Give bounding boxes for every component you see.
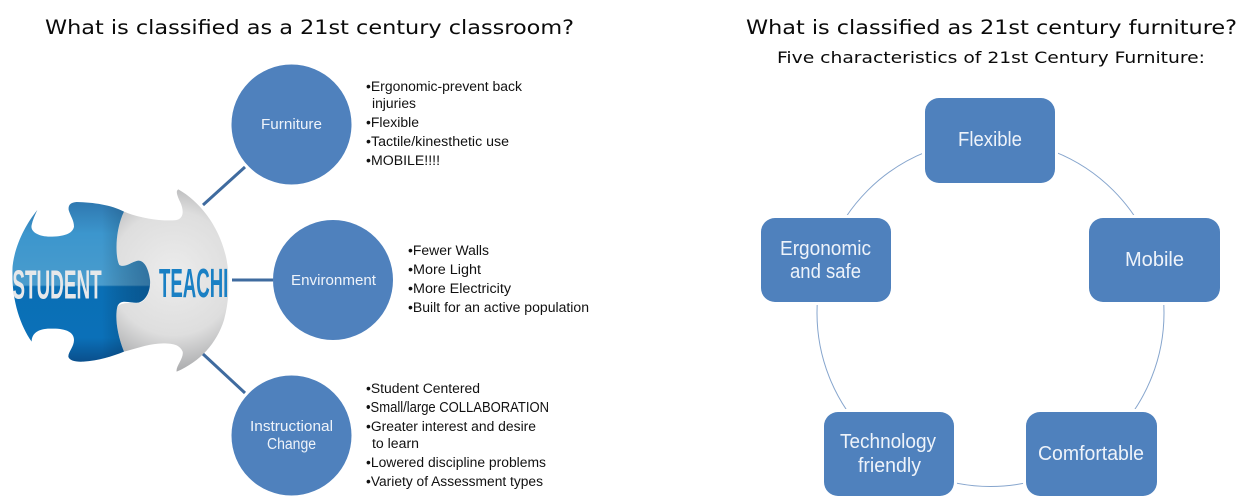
text block: furniture list: •Flexible (366, 115, 419, 130)
text block: furniture list: injuries (372, 96, 416, 111)
text block: environment list (408, 243, 589, 315)
text block: furniture list (366, 79, 522, 168)
title: furniture: What is classified as 21st century furniture? (746, 16, 1237, 39)
panel: classroom diagram: TEACHI (159, 260, 228, 306)
text block: environment list: •More Light (408, 262, 481, 277)
node: instructional change: Change (267, 436, 316, 453)
box: technology friendly: friendly (858, 455, 921, 477)
connector: instructional change (203, 354, 245, 393)
puzzle piece: teacher (116, 189, 229, 372)
node: instructional change (232, 376, 352, 496)
node: furniture (232, 64, 352, 184)
connector: environment (232, 278, 273, 282)
box: flexible: Flexible (958, 129, 1022, 151)
box: comfortable (1023, 409, 1160, 499)
text block: instructional change list: •Greater interest and desire (366, 419, 536, 434)
box: technology friendly: Technology (840, 431, 936, 453)
box: flexible (922, 95, 1058, 186)
puzzle piece: student (12, 202, 150, 362)
icon: student teacher puzzle (12, 189, 229, 372)
node: environment (273, 220, 393, 340)
text block: instructional change list: •Variety of Assessment types (366, 474, 543, 489)
panel: classroom diagram (12, 64, 589, 496)
subtitle: five characteristics: Five characteristics of 21st Century Furniture: (777, 48, 1205, 67)
text block: furniture list: •MOBILE!!!! (366, 153, 440, 168)
box: ergonomic and safe (758, 215, 894, 305)
text block: furniture list: •Ergonomic-prevent back (366, 79, 522, 94)
text block: instructional change list: •Small/large COLLABORATION (366, 400, 549, 416)
text block: instructional change list (366, 381, 549, 489)
title: classroom: What is classified as a 21st century classroom? (45, 16, 574, 39)
text block: instructional change list: •Student Centered (366, 381, 480, 396)
box: ergonomic and safe: and safe (790, 261, 861, 283)
text block: furniture list: •Tactile/kinesthetic use (366, 134, 509, 149)
box: technology friendly (821, 409, 957, 499)
text block: instructional change list: •Lowered discipline problems (366, 455, 546, 470)
panel: furniture cycle diagram (758, 95, 1223, 499)
box: mobile: Mobile (1125, 249, 1184, 271)
text block: instructional change list: to learn (372, 436, 419, 451)
node: furniture: Furniture (261, 117, 322, 133)
box: comfortable: Comfortable (1038, 443, 1144, 465)
cycle ring (817, 140, 1164, 486)
box: mobile (1086, 215, 1223, 305)
text block: environment list: •Fewer Walls (408, 243, 489, 258)
box: ergonomic and safe: Ergonomic (780, 238, 871, 260)
connector: furniture (203, 167, 245, 205)
icon: student teacher puzzle: STUDENT (12, 261, 102, 307)
text block: environment list: •Built for an active population (408, 300, 589, 315)
node: instructional change: Instructional (250, 419, 333, 435)
node: environment: Environment (291, 273, 376, 289)
text block: environment list: •More Electricity (408, 281, 511, 296)
